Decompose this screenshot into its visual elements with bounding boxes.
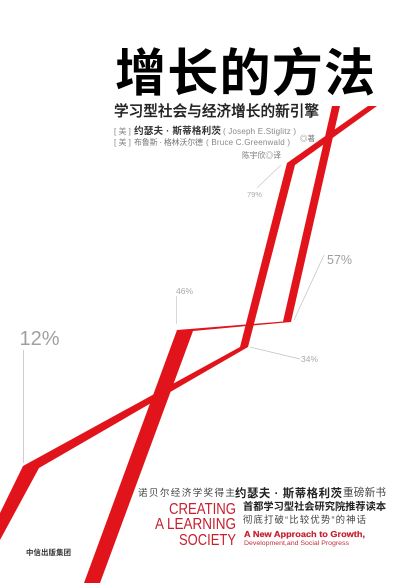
title: 增长的方法 [115,45,375,102]
label: 34%: 34% [301,354,318,364]
author line: Stiglitz [114,125,296,137]
author line: Greenwald: [ 美 ] [114,137,131,147]
red growth line: first path [0,106,377,540]
red English title: A LEARNING [155,516,236,533]
author line: Greenwald: ( Bruce C.Greenwald ) [206,138,290,147]
promo line: Nobel laureate: 诺贝尔经济学奖得主 [138,487,235,499]
label: 79%: 79% [247,190,262,199]
author line: Stiglitz: [ 美 ] [114,126,131,136]
label: 12%: 12% [20,328,60,350]
author line: Greenwald [114,137,290,147]
comparative advantage line: 彻底打破“比较优势”的神话 [243,514,366,525]
label: 34% [250,347,318,364]
promo line: Nobel laureate: 约瑟夫 · 斯蒂格利茨 [235,486,343,500]
author credit mark: ◎著 [300,133,315,143]
red English subtitle: A New Approach to Growth, [244,529,365,539]
red English subtitle [244,529,365,547]
promo line: Nobel laureate: 重磅新书 [343,486,386,499]
label: 79% [247,165,281,199]
red English title: SOCIETY [179,532,236,549]
label: 57%: 57% [327,253,352,267]
author line: Greenwald: 布鲁斯 · 格林沃尔德 [134,137,203,147]
red English title: CREATING [169,501,236,518]
author line: Stiglitz: 约瑟夫 · 斯蒂格利茨 [134,125,221,137]
author line: Stiglitz: ( Joseph E.Stiglitz ) [223,127,296,136]
label: 57% [294,253,352,320]
red English title [155,501,236,549]
red English subtitle: Development,and Social Progress [244,540,349,547]
label: 46% [176,286,193,324]
label: 46%: 46% [176,286,193,296]
label: 12% [20,328,60,463]
promo line: Nobel laureate [138,486,386,500]
subtitle: 学习型社会与经济增长的新引擎 [114,102,319,120]
recommendation line: 首都学习型社会研究院推荐读本 [243,500,386,513]
publisher: 中信出版集团 [26,548,71,557]
red growth line: second path [84,106,340,583]
translator: 陈宇欣◎译 [242,150,281,160]
